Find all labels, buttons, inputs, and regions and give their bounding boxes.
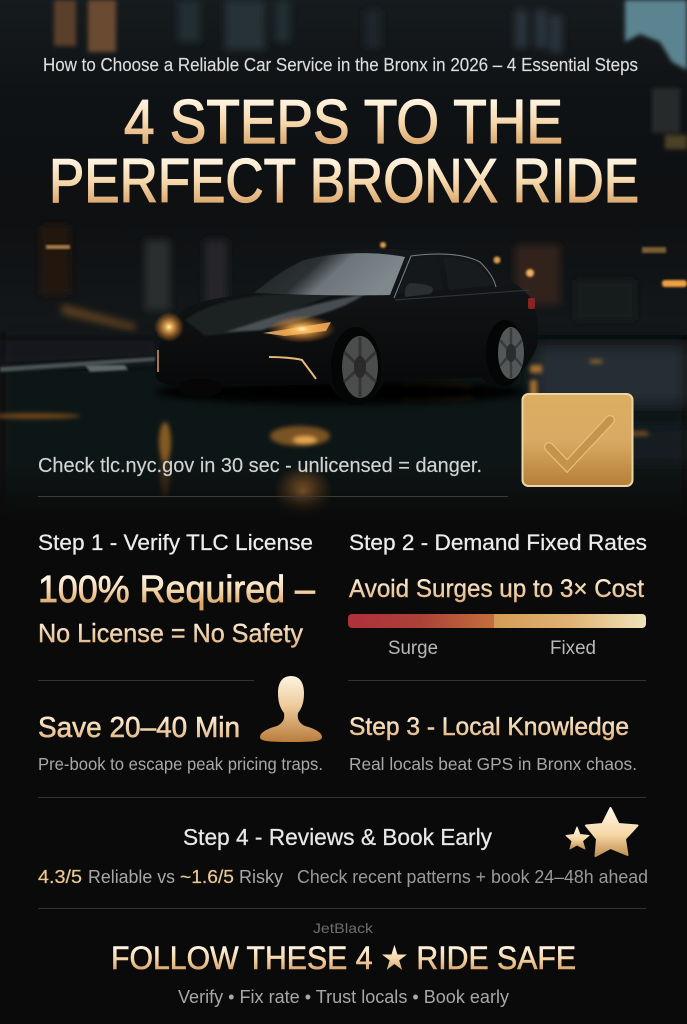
side windows <box>397 257 443 294</box>
panel: step 4: Step 4 - Reviews & Book Early <box>183 824 492 850</box>
panel: save time <box>38 712 323 774</box>
door crease <box>395 290 530 300</box>
panel: step 3 <box>349 713 637 774</box>
street scene background <box>0 0 687 335</box>
closing summary: Verify • Fix rate • Trust locals • Book early <box>178 987 509 1007</box>
subtitle: How to Choose a Reliable Car Service in the Bronx in 2026 – 4 Essential Steps <box>43 55 638 75</box>
lower facade <box>40 225 635 320</box>
icon: person silhouette <box>260 676 322 742</box>
main title: 4 STEPS TO THE <box>124 88 563 157</box>
road reflections <box>0 360 648 462</box>
panel: step 4: Reliable vs <box>88 867 175 887</box>
panel: step 1 <box>38 530 316 648</box>
license check note: Check tlc.nyc.gov in 30 sec - unlicensed = danger. <box>38 455 482 477</box>
panel: step 1: No License = No Safety <box>38 618 303 648</box>
panel: step 4: Check recent patterns + book 24–48h ahead <box>297 867 648 887</box>
risky rating: ~1.6/5 <box>180 867 234 887</box>
panel: step 3: Real locals beat GPS in Bronx chaos. <box>349 754 637 774</box>
panel: step 4 <box>38 824 648 887</box>
car <box>154 249 538 405</box>
surge versus fixed bar <box>348 614 646 628</box>
panel: step 1: Step 1 - Verify TLC License <box>38 530 313 555</box>
panel: step 2 <box>348 530 647 659</box>
panel: step 2: Fixed <box>550 638 596 659</box>
divider <box>348 680 646 681</box>
light strips <box>269 357 316 379</box>
car shadow <box>155 380 525 404</box>
bottom left wheel <box>178 379 222 397</box>
panel: step 2: Surge <box>388 638 438 659</box>
panel: save time: Save 20–40 Min <box>38 712 240 744</box>
mirror <box>405 283 433 297</box>
front wheel <box>331 327 381 405</box>
divider <box>38 496 508 497</box>
panel: step 2: Step 2 - Demand Fixed Rates <box>349 530 647 555</box>
icon: two gold stars <box>566 808 638 856</box>
wet road <box>0 335 687 552</box>
car body <box>156 249 538 403</box>
panel: step 3: Step 3 - Local Knowledge <box>349 713 629 741</box>
hood sheen <box>185 290 345 336</box>
panel: save time: Pre-book to escape peak pricing traps. <box>38 754 323 774</box>
divider <box>38 908 646 909</box>
headlight left <box>154 312 184 342</box>
windshield <box>254 253 405 295</box>
main title <box>49 88 639 216</box>
reliable rating: 4.3/5 <box>38 867 82 887</box>
panel: step 4: Risky <box>239 867 283 887</box>
divider <box>38 680 254 681</box>
panel: step 2: Avoid Surges up to 3× Cost <box>349 575 644 603</box>
brand name: JetBlack <box>313 920 374 936</box>
icon: gold check badge <box>522 394 632 486</box>
rear wheel <box>486 320 524 386</box>
panel: step 1: 100% Required – <box>38 569 316 611</box>
closing call to action: FOLLOW THESE 4 ★ RIDE SAFE <box>111 940 576 976</box>
sky corner <box>625 0 687 70</box>
headlight right <box>263 322 331 336</box>
divider <box>38 797 646 798</box>
lit windows <box>54 0 687 149</box>
